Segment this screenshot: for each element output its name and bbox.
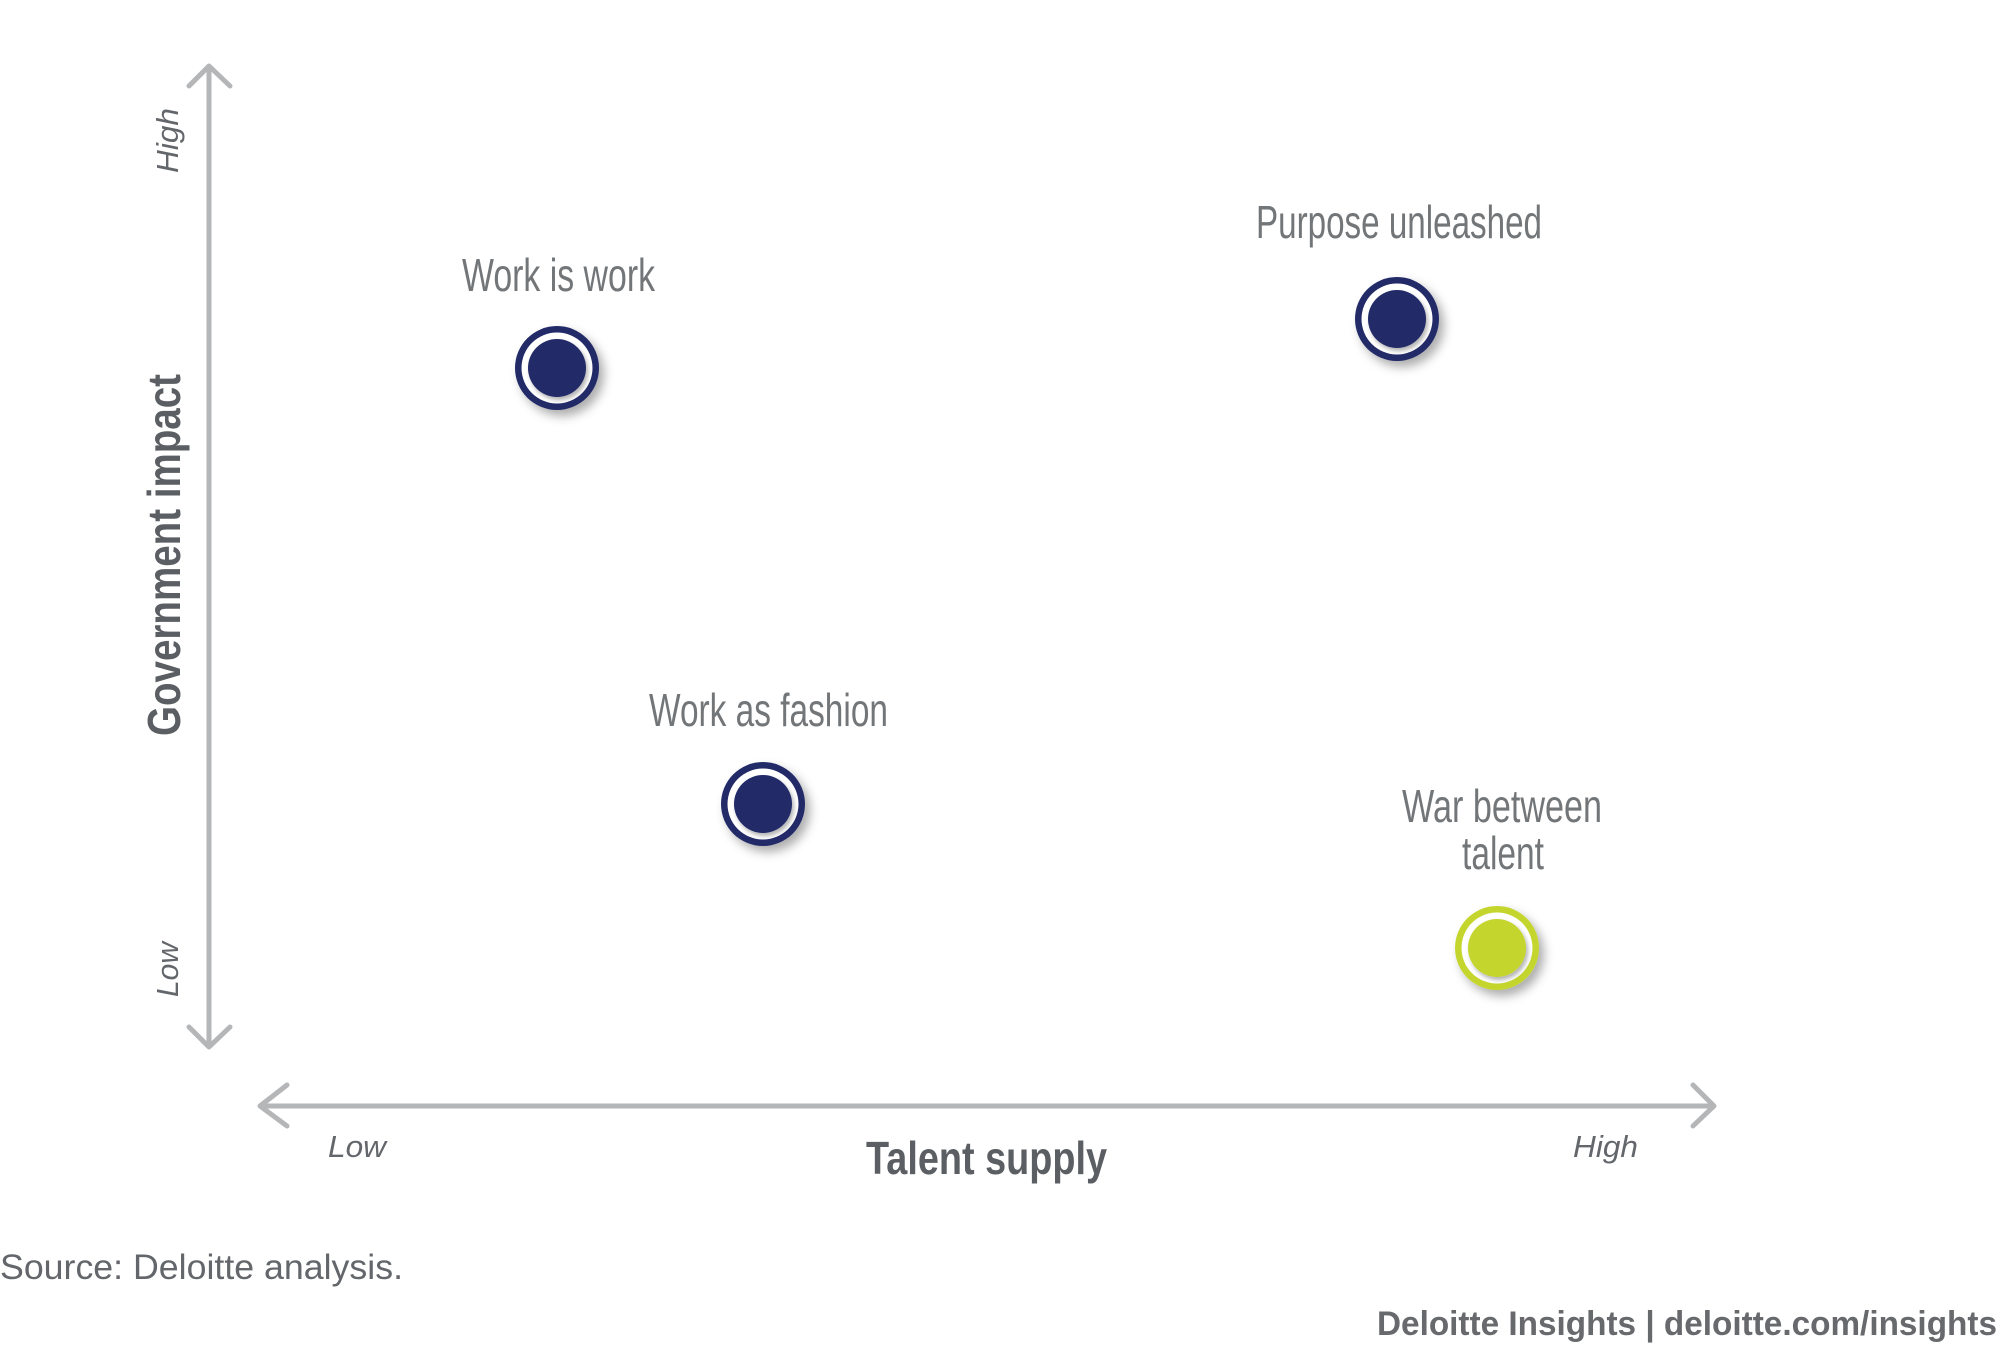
label: Purpose unleashed: Purpose unleashed	[1256, 196, 1542, 248]
y-axis title: Government impact	[138, 374, 190, 736]
x-axis high label: High	[1573, 1129, 1638, 1164]
label: War between talent: War between	[1402, 780, 1602, 832]
x-axis low label: Low	[328, 1129, 389, 1164]
x-axis title: Talent supply	[866, 1132, 1107, 1184]
footer credit: Deloitte Insights | deloitte.com/insights	[1377, 1305, 1997, 1343]
marker: Work is work	[515, 326, 599, 410]
source note: Source: Deloitte analysis.	[0, 1248, 403, 1287]
marker: Purpose unleashed	[1355, 277, 1439, 361]
label: War between talent	[1402, 780, 1602, 879]
label: War between talent: talent	[1462, 827, 1544, 879]
label: Work as fashion: Work as fashion	[649, 684, 888, 736]
vertical axis arrow	[189, 66, 230, 1047]
marker: Work as fashion	[721, 762, 805, 846]
horizontal axis arrow	[260, 1085, 1714, 1126]
marker: War between talent	[1455, 906, 1539, 990]
y-axis low label: Low	[150, 939, 185, 997]
y-axis high label: High	[150, 108, 185, 173]
label: Work is work: Work is work	[462, 249, 656, 301]
